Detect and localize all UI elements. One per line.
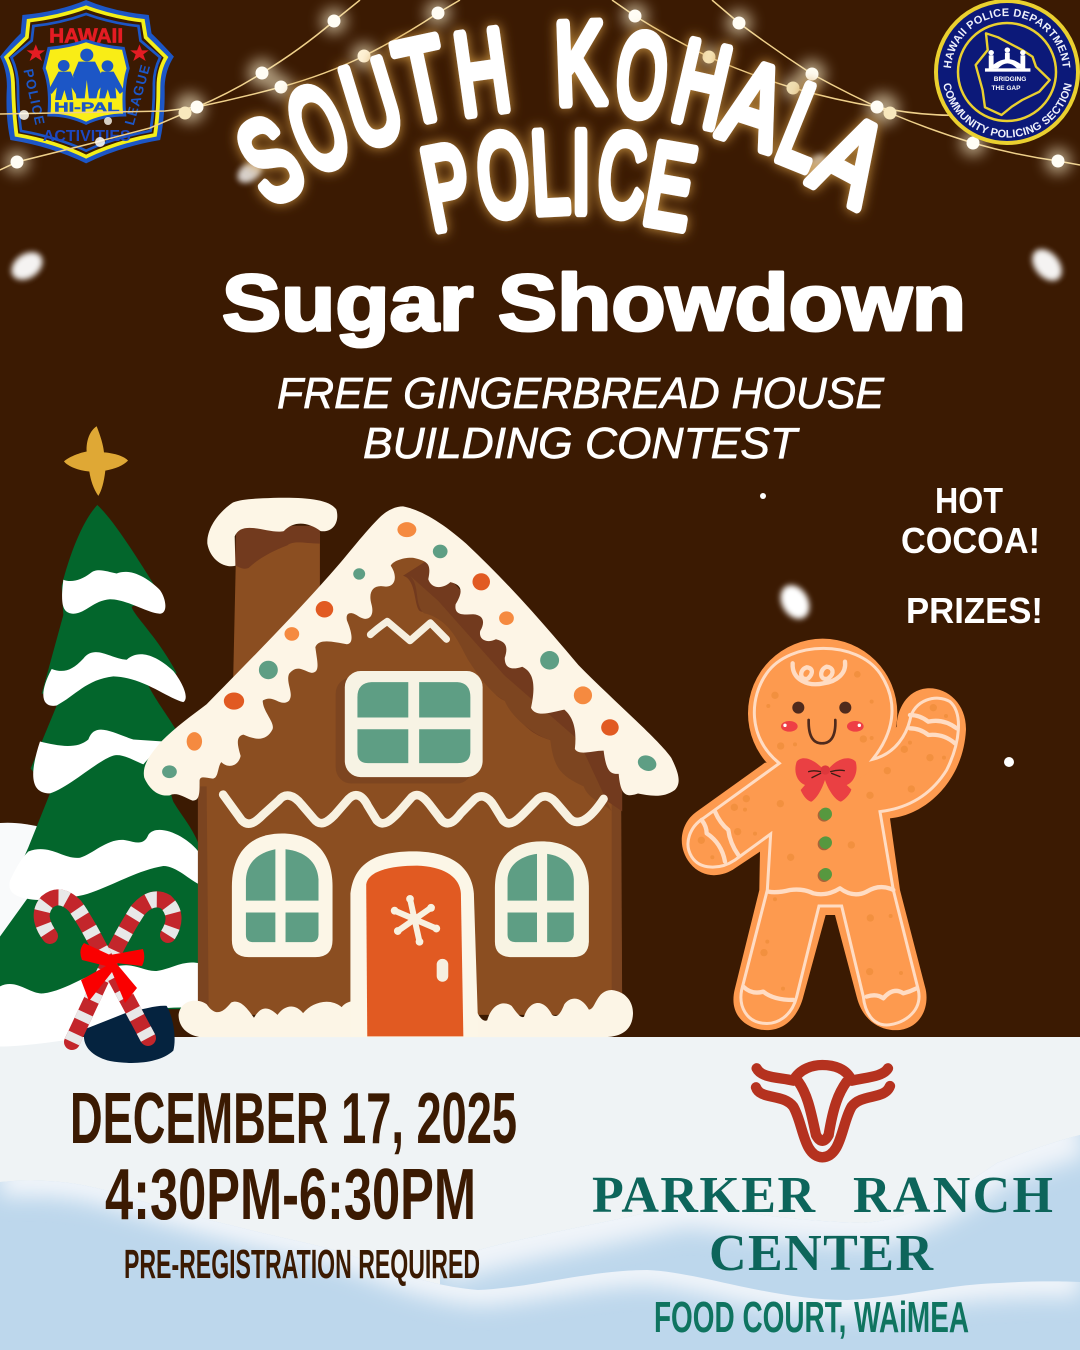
- time: 4:30PM-6:30PM: [105, 1155, 476, 1235]
- attic window: [336, 671, 483, 784]
- title: South Kohala Police: O: [271, 58, 365, 197]
- subheading: FREE GINGERBREAD HOUSE: [277, 369, 885, 418]
- bow base: [84, 1006, 175, 1063]
- eyes: [792, 702, 851, 714]
- subheading: [277, 369, 885, 468]
- title: South Kohala Police: L: [763, 60, 847, 195]
- candy canes with bow: [42, 897, 174, 1042]
- snow hill behind tree: [0, 823, 45, 1000]
- door: [350, 851, 478, 1036]
- heading: Sugar Showdown: Sugar Showdown: [222, 258, 966, 347]
- smile: [809, 720, 835, 743]
- title: South Kohala Police: H: [447, 6, 517, 140]
- crumbs: [698, 671, 948, 991]
- inner shield: [44, 41, 128, 123]
- left window: [232, 834, 333, 957]
- title: South Kohala Police: E: [636, 119, 704, 255]
- string lights: [0, 0, 1080, 174]
- title: South Kohala Police: [219, 0, 908, 256]
- logo: bull head: [756, 1065, 890, 1157]
- title: South Kohala Police: S: [219, 93, 322, 229]
- shield outer: [0, 0, 174, 163]
- body: [682, 688, 966, 1030]
- red ribbon bow: [80, 943, 144, 1003]
- title: South Kohala Police: I: [571, 108, 591, 237]
- callout: hot cocoa: [901, 480, 1040, 561]
- logo: parker ranch: RANCH: [853, 1167, 1053, 1224]
- seal top text: HAWAII POLICE DEPARTMENT: [944, 8, 1070, 68]
- hi-pal: HI-PAL: [54, 100, 120, 114]
- christmas tree: [0, 426, 200, 1063]
- title: South Kohala Police: O: [471, 108, 535, 242]
- title: South Kohala Police: C: [593, 108, 651, 241]
- callout: hot cocoa: COCOA!: [901, 520, 1040, 561]
- gingerbread house: [144, 498, 679, 1037]
- title: South Kohala Police: P: [413, 120, 482, 256]
- Hi-PAL badge logo: [0, 0, 174, 163]
- seal label: BRIDGING: [994, 76, 1026, 83]
- bridging the gap icon: [985, 47, 1030, 72]
- roof shadow: [403, 558, 622, 811]
- activities: ACTIVITIES: [43, 127, 131, 145]
- seal bottom text: COMMUNITY POLICING SECTION: [944, 83, 1072, 138]
- icing details: [702, 662, 957, 1000]
- stars: [27, 44, 149, 61]
- ground icing: [179, 990, 633, 1037]
- logo: center: CENTER: [709, 1225, 934, 1282]
- gingerbread man: [682, 639, 966, 1030]
- attic squiggle: [370, 621, 447, 641]
- snowy ground panel: [0, 1037, 1080, 1350]
- buttons: [818, 808, 832, 882]
- light halos: [5, 0, 1071, 174]
- wall icing wave: [223, 795, 604, 824]
- head: [748, 639, 897, 788]
- subheading: BUILDING CONTEST: [363, 419, 800, 468]
- bow tie: [795, 758, 857, 802]
- title: South Kohala Police: O: [611, 7, 674, 142]
- title: South Kohala Police: A: [708, 36, 802, 176]
- family figures: [48, 49, 124, 100]
- date: DECEMBER 17, 2025: [70, 1079, 517, 1159]
- hawaii: HAWAII: [49, 25, 123, 48]
- league: LEAGUE: [122, 63, 153, 127]
- candy cane right: [72, 899, 174, 1042]
- title: South Kohala Police: A: [795, 89, 908, 231]
- light strands: [0, 0, 1080, 170]
- blurred snowflakes: [6, 150, 1068, 767]
- callout: hot cocoa: HOT: [935, 480, 1003, 521]
- snow bands: [0, 570, 200, 1046]
- roof icing: [144, 506, 679, 801]
- title: South Kohala Police: L: [528, 107, 572, 239]
- light bulbs: [10, 6, 1064, 168]
- seal label 2: THE GAP: [992, 85, 1021, 92]
- candy cane left: [42, 897, 148, 1038]
- community policing seal: [934, 0, 1080, 145]
- cheeks: [781, 721, 864, 732]
- title: South Kohala Police: H: [663, 16, 741, 153]
- title: South Kohala Police: K: [553, 0, 607, 129]
- island outline: [976, 33, 1050, 115]
- foliage: [0, 505, 200, 1009]
- roof candy dots: [162, 522, 659, 778]
- right window: [495, 841, 589, 957]
- logo: parker ranch: PARKER: [592, 1167, 816, 1224]
- door snowflake: [391, 895, 440, 946]
- registration note: PRE-REGISTRATION REQUIRED: [124, 1241, 480, 1287]
- seal rings: [936, 1, 1078, 143]
- title: South Kohala Police: U: [329, 35, 416, 173]
- title: South Kohala Police: T: [385, 12, 459, 149]
- callout: prizes: PRIZES!: [906, 590, 1043, 631]
- chimney: [207, 498, 337, 690]
- police: POLICE: [20, 68, 48, 126]
- house walls: [200, 533, 622, 1015]
- door handle: [437, 959, 448, 982]
- star: [64, 426, 128, 496]
- icing outline: [688, 648, 958, 1025]
